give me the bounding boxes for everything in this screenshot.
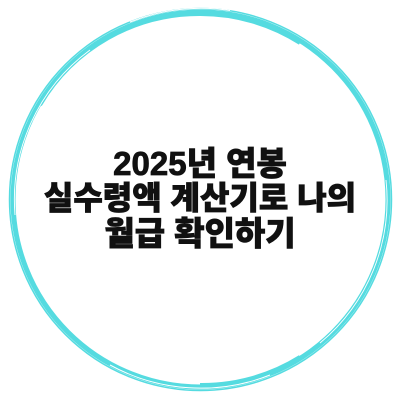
title: 2025년 연봉 (113, 145, 287, 182)
title: 월급 확인하기 (104, 215, 296, 252)
title: 실수령액 계산기로 나의 (44, 180, 356, 216)
title (44, 145, 356, 252)
